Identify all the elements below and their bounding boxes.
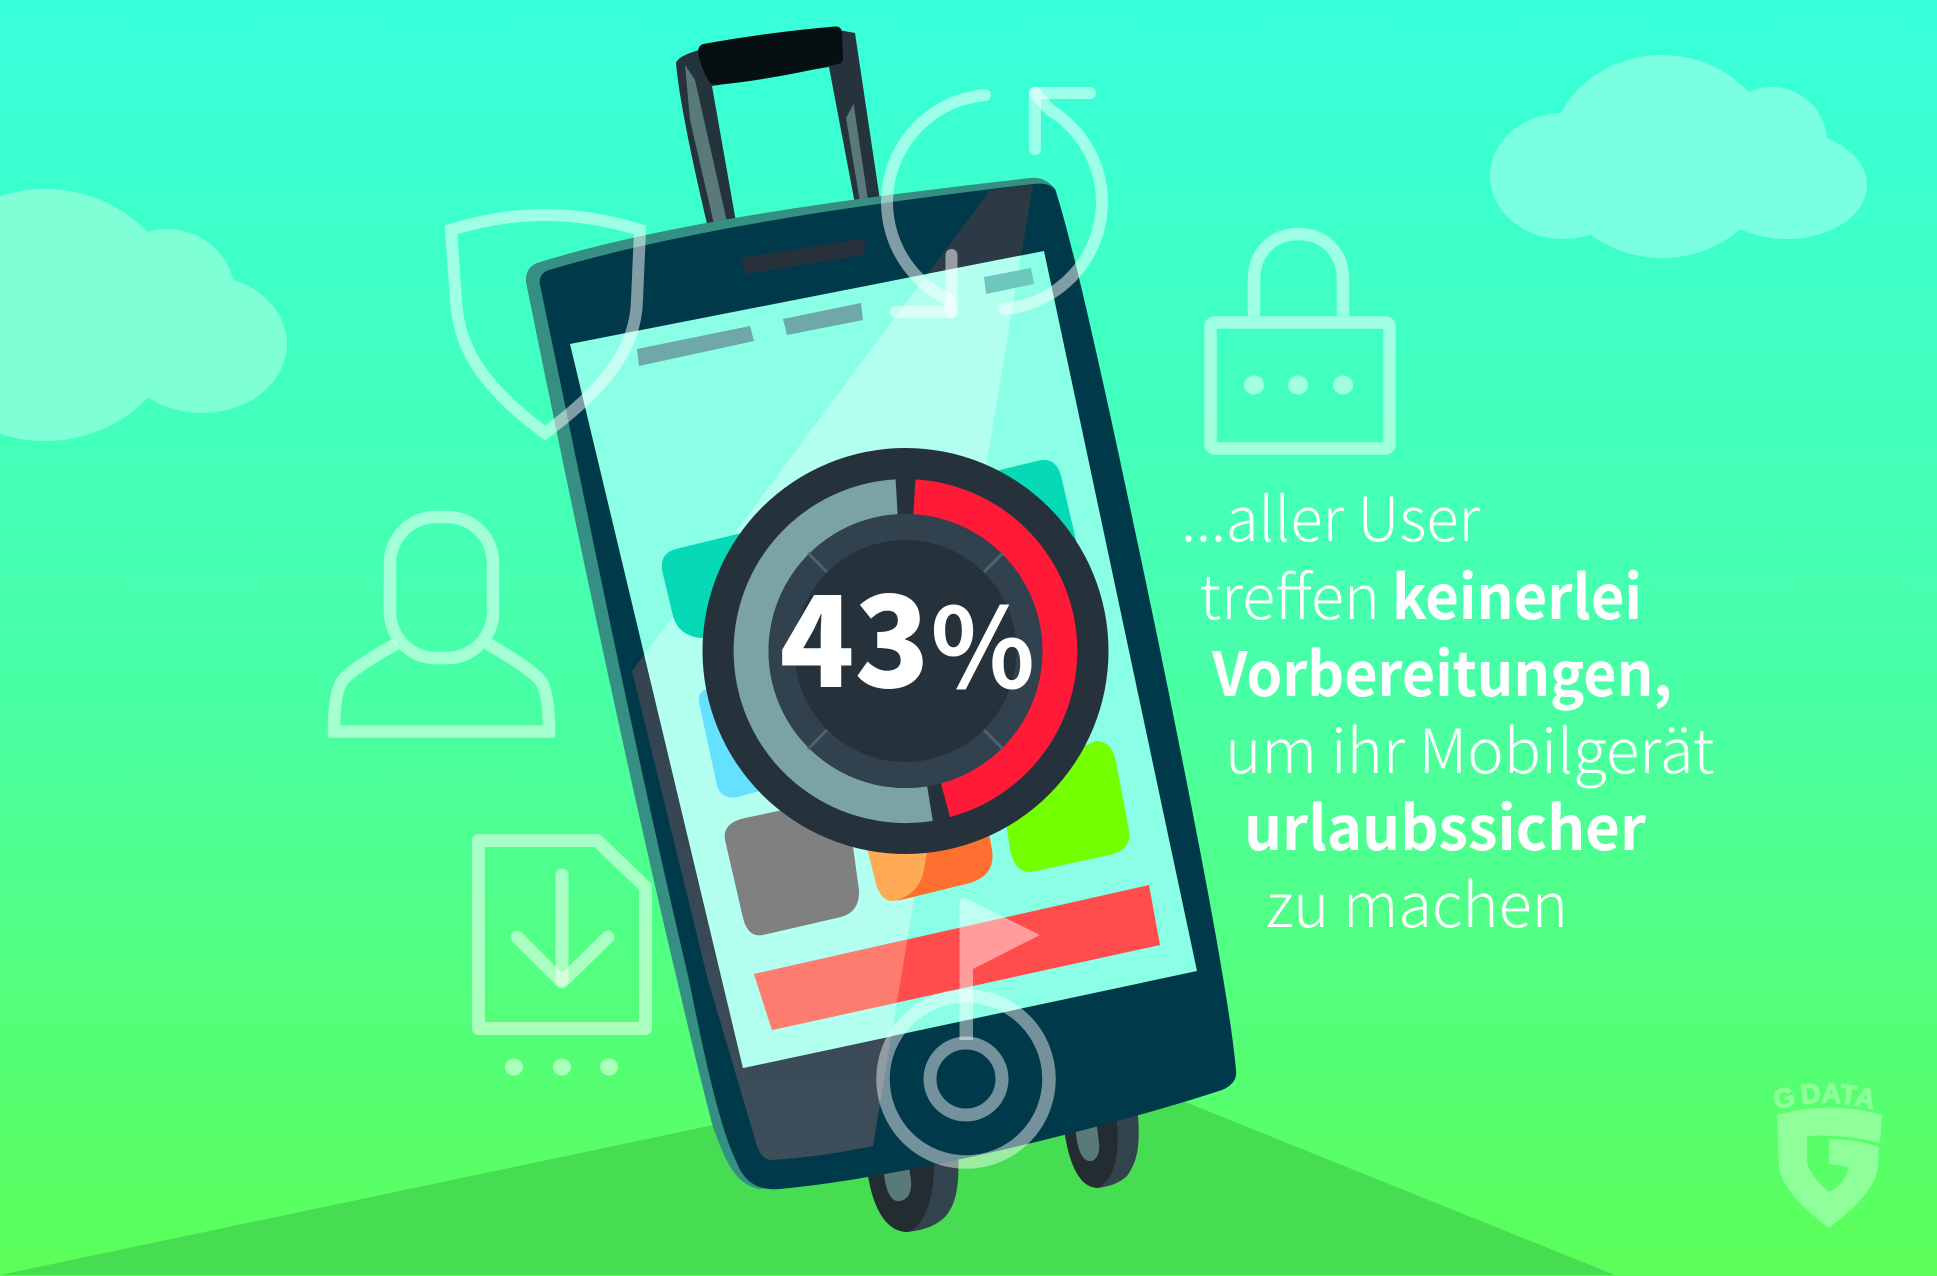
wheel left: [866, 1150, 958, 1232]
inner disc: [794, 540, 1016, 762]
ground hill: [0, 1052, 1615, 1275]
logo shield: [1777, 1108, 1882, 1228]
text block: [1181, 470, 1714, 945]
phone back edge: [526, 178, 1100, 1189]
line 3: Vorbereitungen,: [1211, 625, 1672, 714]
status bar 1: [637, 326, 754, 366]
app orange: [860, 810, 993, 900]
app grey: [725, 800, 859, 935]
cloud left: [0, 189, 287, 441]
wheel right: [1063, 1105, 1139, 1188]
line 6: zu machen: [1266, 856, 1568, 945]
line 4: um ihr Mobilgerät: [1225, 702, 1714, 791]
logo wordmark: G DATA: [1774, 1083, 1873, 1110]
icon: user: [334, 517, 549, 732]
ticks: [808, 553, 1003, 749]
icon: shield: [451, 215, 640, 433]
cloud right: [1490, 55, 1867, 258]
phone body: [540, 184, 1236, 1189]
red arc: [914, 497, 1060, 800]
inner ring: [768, 514, 1042, 788]
line 5: urlaubssicher: [1244, 779, 1646, 868]
light reflection on screen: [644, 256, 1021, 1068]
app blue: [699, 675, 800, 798]
icon: download document: [478, 840, 646, 1076]
red bar: [754, 885, 1160, 1030]
grey arc: [751, 497, 930, 806]
icon: lock: [1210, 234, 1390, 448]
percent sign: %: [930, 559, 1035, 720]
icon: play flag with home button: [883, 898, 1049, 1162]
app orange light: [860, 820, 932, 901]
line 1: ...aller User: [1181, 470, 1481, 559]
app green: [1000, 741, 1129, 872]
donut gauge 43 percent: [702, 448, 1108, 854]
value 43: 43: [780, 540, 930, 724]
logo: G DATA: [1774, 1083, 1882, 1228]
red bar light part: [754, 940, 908, 1030]
gauge base: [702, 448, 1108, 854]
icon: refresh: [887, 93, 1102, 312]
phone suitcase: [526, 178, 1236, 1189]
speaker slot: [740, 238, 866, 274]
suitcase handle: [676, 26, 880, 228]
status bar 3: [984, 268, 1034, 294]
app teal: [662, 460, 1090, 638]
status bar 2: [783, 303, 863, 335]
light reflection on body: [632, 184, 1033, 1160]
line 2 bold: keinerlei: [1392, 548, 1642, 637]
line 2 regular: treffen: [1200, 548, 1380, 637]
screen: [570, 251, 1197, 1068]
